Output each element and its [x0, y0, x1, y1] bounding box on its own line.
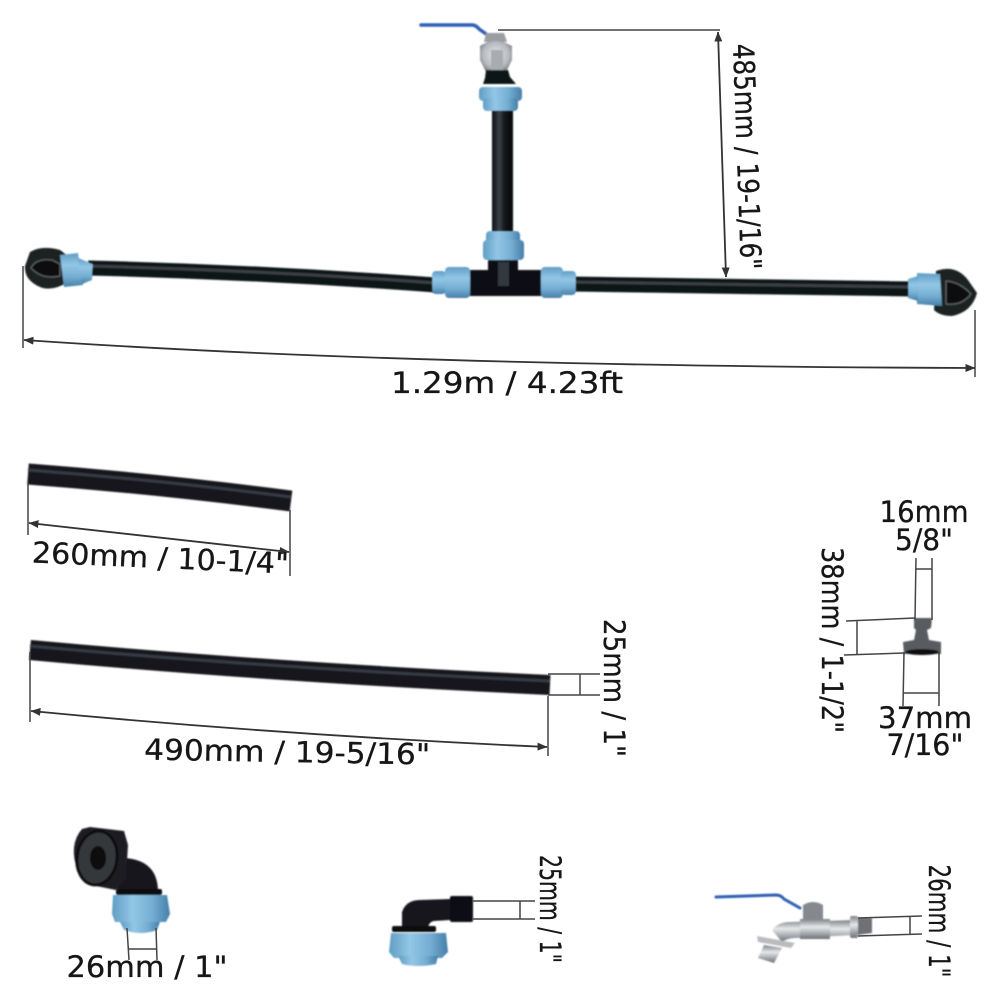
vertical pipe	[492, 105, 513, 235]
panel: faucet	[716, 864, 956, 978]
long pipe	[30, 646, 550, 685]
panel: assembled T pipe	[25, 25, 977, 316]
label: 260mm / 10-1/4"	[31, 535, 290, 581]
label 7/16: 7/16"	[886, 728, 964, 762]
dimension lines	[28, 484, 290, 576]
icon: grey cap	[903, 618, 941, 655]
panel: small threaded cap	[815, 495, 972, 762]
label 37mm: 37mm	[878, 701, 972, 735]
dimension: 26mm	[127, 928, 157, 960]
label 16mm: 16mm	[880, 495, 968, 529]
dimension: 485mm height: 485mm / 19-1/16"	[726, 43, 768, 270]
horizontal pipe left	[88, 266, 436, 285]
label: 26mm / 1"	[66, 950, 228, 984]
dimension: overall length 1.29m: 1.29m / 4.23ft	[391, 366, 623, 400]
icon: elbow fitting	[73, 827, 170, 933]
label: 490mm / 19-5/16"	[144, 733, 430, 771]
dimension lines	[858, 916, 922, 936]
short pipe	[28, 470, 291, 501]
dimension lines	[30, 652, 548, 756]
icon: blue nut top	[479, 87, 522, 111]
dimension: 16mm	[915, 558, 932, 620]
diameter label: 25mm / 1"	[597, 619, 631, 757]
icon: right end cap	[908, 269, 977, 316]
panel: elbow with large thread	[66, 827, 228, 984]
icon: ball valve top	[421, 25, 516, 84]
dimension: 38mm	[844, 618, 915, 655]
icon: elbow fitting	[389, 896, 473, 966]
panel: elbow 25mm	[389, 855, 567, 966]
label 5/8: 5/8"	[895, 523, 953, 557]
icon: left end cap	[25, 248, 93, 289]
horizontal pipe right	[572, 282, 915, 289]
dimension lines	[473, 901, 535, 919]
dimension: overall length 1.29m	[23, 266, 975, 400]
icon: faucet	[716, 895, 872, 963]
dimension: 37mm	[903, 652, 939, 706]
icon: T connector	[432, 231, 576, 298]
panel: short pipe 260mm	[28, 470, 291, 581]
dimension: 485mm height	[498, 30, 768, 277]
diameter lines	[548, 674, 600, 695]
panel: long pipe 490mm	[30, 619, 631, 771]
label 38mm: 38mm / 1-1/2"	[815, 547, 849, 733]
